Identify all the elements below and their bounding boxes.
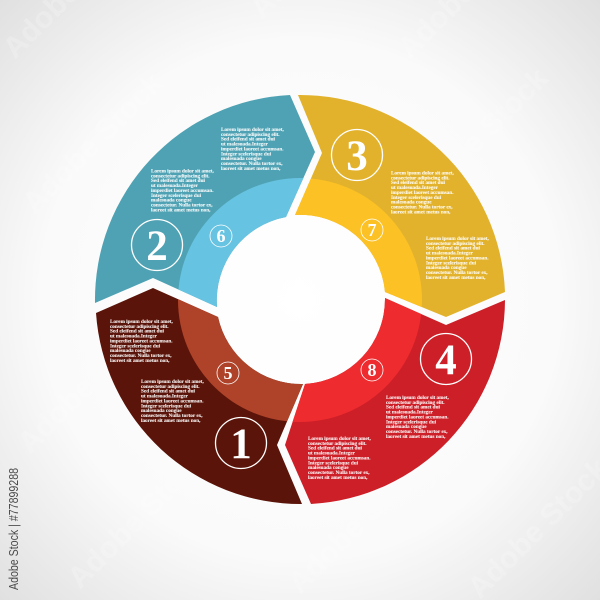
stock caption: Adobe Stock | #77899288 — [7, 468, 21, 590]
inner band 7 yellow — [295, 178, 422, 308]
text block: teal upper: Integer scelerisque dui — [221, 151, 272, 157]
text block: brown lower: ut malesuada.Integer — [141, 394, 189, 400]
text block: yellow upper: malesuada congue — [391, 200, 432, 206]
text block: yellow lower: malesuada congue — [426, 265, 467, 271]
number 5 badge: 5 — [224, 363, 232, 383]
text block: red upper: Lorem ipsum dolor sit amet, — [386, 395, 449, 401]
text block: brown lower: Lorem ipsum dolor sit amet, — [141, 379, 204, 385]
number 4 badge — [420, 334, 472, 384]
text block: teal lower: Sed eleifend sit amet dui — [151, 178, 205, 184]
text block: red upper: ut malesuada.Integer — [386, 410, 434, 416]
text block: red upper: consectetur. Nulla tortor ex, — [386, 429, 448, 435]
number 1 badge — [216, 418, 266, 468]
text block: brown upper: consectetur. Nulla tortor ex, — [110, 353, 172, 359]
text block: yellow lower: consectetur. Nulla tortor ex, — [426, 270, 488, 276]
text block: red upper: imperdiet laoreet accumsan. — [386, 414, 449, 420]
text block: teal lower: ut malesuada.Integer — [151, 183, 199, 189]
number 2 badge — [132, 220, 182, 270]
text block: brown upper: consectetur adipiscing elit. — [110, 324, 169, 330]
text block: red lower — [308, 436, 371, 481]
inner band 6 light blue — [178, 178, 304, 307]
text block: red upper: malesuada congue — [386, 424, 427, 430]
number 8 badge — [361, 359, 383, 381]
text block: yellow lower: Sed eleifend sit amet dui — [426, 246, 480, 252]
text block: red upper: consectetur adipiscing elit. — [386, 400, 445, 406]
text block: yellow upper: Sed eleifend sit amet dui — [391, 180, 445, 186]
text block: teal upper: consectetur adipiscing elit. — [221, 132, 280, 138]
text block: yellow upper: consectetur adipiscing elit. — [391, 175, 450, 181]
number 7 badge: 7 — [368, 220, 376, 240]
number 4 badge: 4 — [435, 337, 457, 384]
text block: teal upper: imperdiet laoreet accumsan. — [221, 146, 284, 152]
panel: segment 3 yellow — [295, 95, 505, 317]
text block: yellow lower: Integer scelerisque dui — [426, 260, 477, 266]
number 7 badge — [361, 219, 383, 241]
number 3 badge — [332, 130, 382, 180]
text block: yellow upper — [391, 170, 454, 215]
text block: teal lower: imperdiet laoreet accumsan. — [151, 188, 214, 194]
text block: red lower: consectetur adipiscing elit. — [308, 441, 367, 447]
text block: yellow lower: laoreet sit amet metus non, — [426, 275, 486, 281]
text block: yellow upper: imperdiet laoreet accumsan. — [391, 190, 454, 196]
text block: teal upper: ut malesuada.Integer — [221, 142, 269, 148]
text block: red upper — [386, 395, 449, 440]
text block: brown upper: ut malesuada.Integer — [110, 334, 158, 340]
text block: yellow upper: laoreet sit amet metus non, — [391, 209, 451, 215]
number 2 badge: 2 — [146, 223, 168, 270]
text block: teal lower: Lorem ipsum dolor sit amet, — [151, 168, 214, 174]
text block: teal lower: consectetur. Nulla tortor ex, — [151, 202, 213, 208]
text block: yellow upper: ut malesuada.Integer — [391, 185, 439, 191]
text block: red upper: Integer scelerisque dui — [386, 419, 437, 425]
text block: teal lower: laoreet sit amet metus non, — [151, 207, 211, 213]
text block: red upper: laoreet sit amet metus non, — [386, 434, 446, 440]
inner band 5 rust — [178, 299, 303, 422]
text block: teal upper: consectetur. Nulla tortor ex, — [221, 161, 283, 167]
text block: yellow upper: consectetur. Nulla tortor ex, — [391, 204, 453, 210]
watermarks: Adobe Stock — [402, 62, 555, 215]
text block: teal upper: Sed eleifend sit amet dui — [221, 137, 275, 143]
text block: brown upper — [110, 319, 173, 364]
text block: brown lower: Integer scelerisque dui — [141, 403, 192, 409]
text block: teal upper — [221, 127, 284, 172]
text block: brown lower: consectetur. Nulla tortor ex, — [141, 413, 203, 419]
watermarks: Adobe Stock — [282, 447, 435, 600]
text block: teal lower — [151, 168, 214, 213]
panel: segment 4 red — [285, 298, 505, 504]
text block: brown upper: Sed eleifend sit amet dui — [110, 329, 164, 335]
panel: segment 2 teal — [94, 95, 315, 307]
text block: teal lower: consectetur adipiscing elit. — [151, 173, 210, 179]
text block: yellow lower: consectetur adipiscing elit. — [426, 241, 485, 247]
number 6 badge: 6 — [216, 226, 226, 246]
watermarks: Adobe Stock — [62, 442, 215, 595]
text block: yellow upper: Integer scelerisque dui — [391, 195, 442, 201]
text block: brown lower: malesuada congue — [141, 408, 182, 414]
text block: red lower: imperdiet laoreet accumsan. — [308, 455, 371, 461]
text block: brown lower: laoreet sit amet metus non, — [141, 418, 201, 424]
text block: teal lower: malesuada congue — [151, 198, 192, 204]
text block: brown lower: Sed eleifend sit amet dui — [141, 389, 195, 395]
text block: yellow lower: ut malesuada.Integer — [426, 251, 474, 257]
text block: teal upper: laoreet sit amet metus non, — [221, 166, 281, 172]
number 3 badge: 3 — [346, 133, 368, 180]
text block: teal upper: Lorem ipsum dolor sit amet, — [221, 127, 284, 133]
text block: brown lower: consectetur adipiscing elit. — [141, 384, 200, 390]
text block: teal upper: malesuada congue — [221, 156, 262, 162]
text block: yellow lower: Lorem ipsum dolor sit amet, — [426, 236, 489, 242]
text block: red upper: Sed eleifend sit amet dui — [386, 405, 440, 411]
inner band 8 bright red — [292, 298, 421, 422]
text block: red lower: consectetur. Nulla tortor ex, — [308, 470, 370, 476]
text block: brown upper: malesuada congue — [110, 348, 151, 354]
text block: teal lower: Integer scelerisque dui — [151, 193, 202, 199]
text block: red lower: Sed eleifend sit amet dui — [308, 446, 362, 452]
number 6 badge — [210, 225, 232, 247]
text block: yellow upper: Lorem ipsum dolor sit amet, — [391, 170, 454, 176]
text block: yellow lower — [426, 236, 489, 281]
text block: brown upper: Integer scelerisque dui — [110, 343, 161, 349]
number 1 badge: 1 — [230, 421, 252, 468]
text block: yellow lower: imperdiet laoreet accumsan. — [426, 255, 489, 261]
text block: red lower: laoreet sit amet metus non, — [308, 475, 368, 481]
text block: red lower: Integer scelerisque dui — [308, 460, 359, 466]
text block: brown upper: imperdiet laoreet accumsan. — [110, 338, 173, 344]
text block: brown lower — [141, 379, 204, 424]
text block: brown upper: laoreet sit amet metus non, — [110, 358, 170, 364]
text block: brown lower: imperdiet laoreet accumsan. — [141, 398, 204, 404]
watermarks: Adobe Stock — [12, 307, 165, 460]
number 5 badge — [217, 362, 239, 384]
text block: red lower: malesuada congue — [308, 465, 349, 471]
text block: red lower: Lorem ipsum dolor sit amet, — [308, 436, 371, 442]
text block: red lower: ut malesuada.Integer — [308, 451, 356, 457]
panel: segment 1 brown — [96, 288, 303, 504]
text block: brown upper: Lorem ipsum dolor sit amet, — [110, 319, 173, 325]
number 8 badge: 8 — [368, 360, 376, 380]
watermarks: Adobe Stock — [17, 67, 170, 220]
